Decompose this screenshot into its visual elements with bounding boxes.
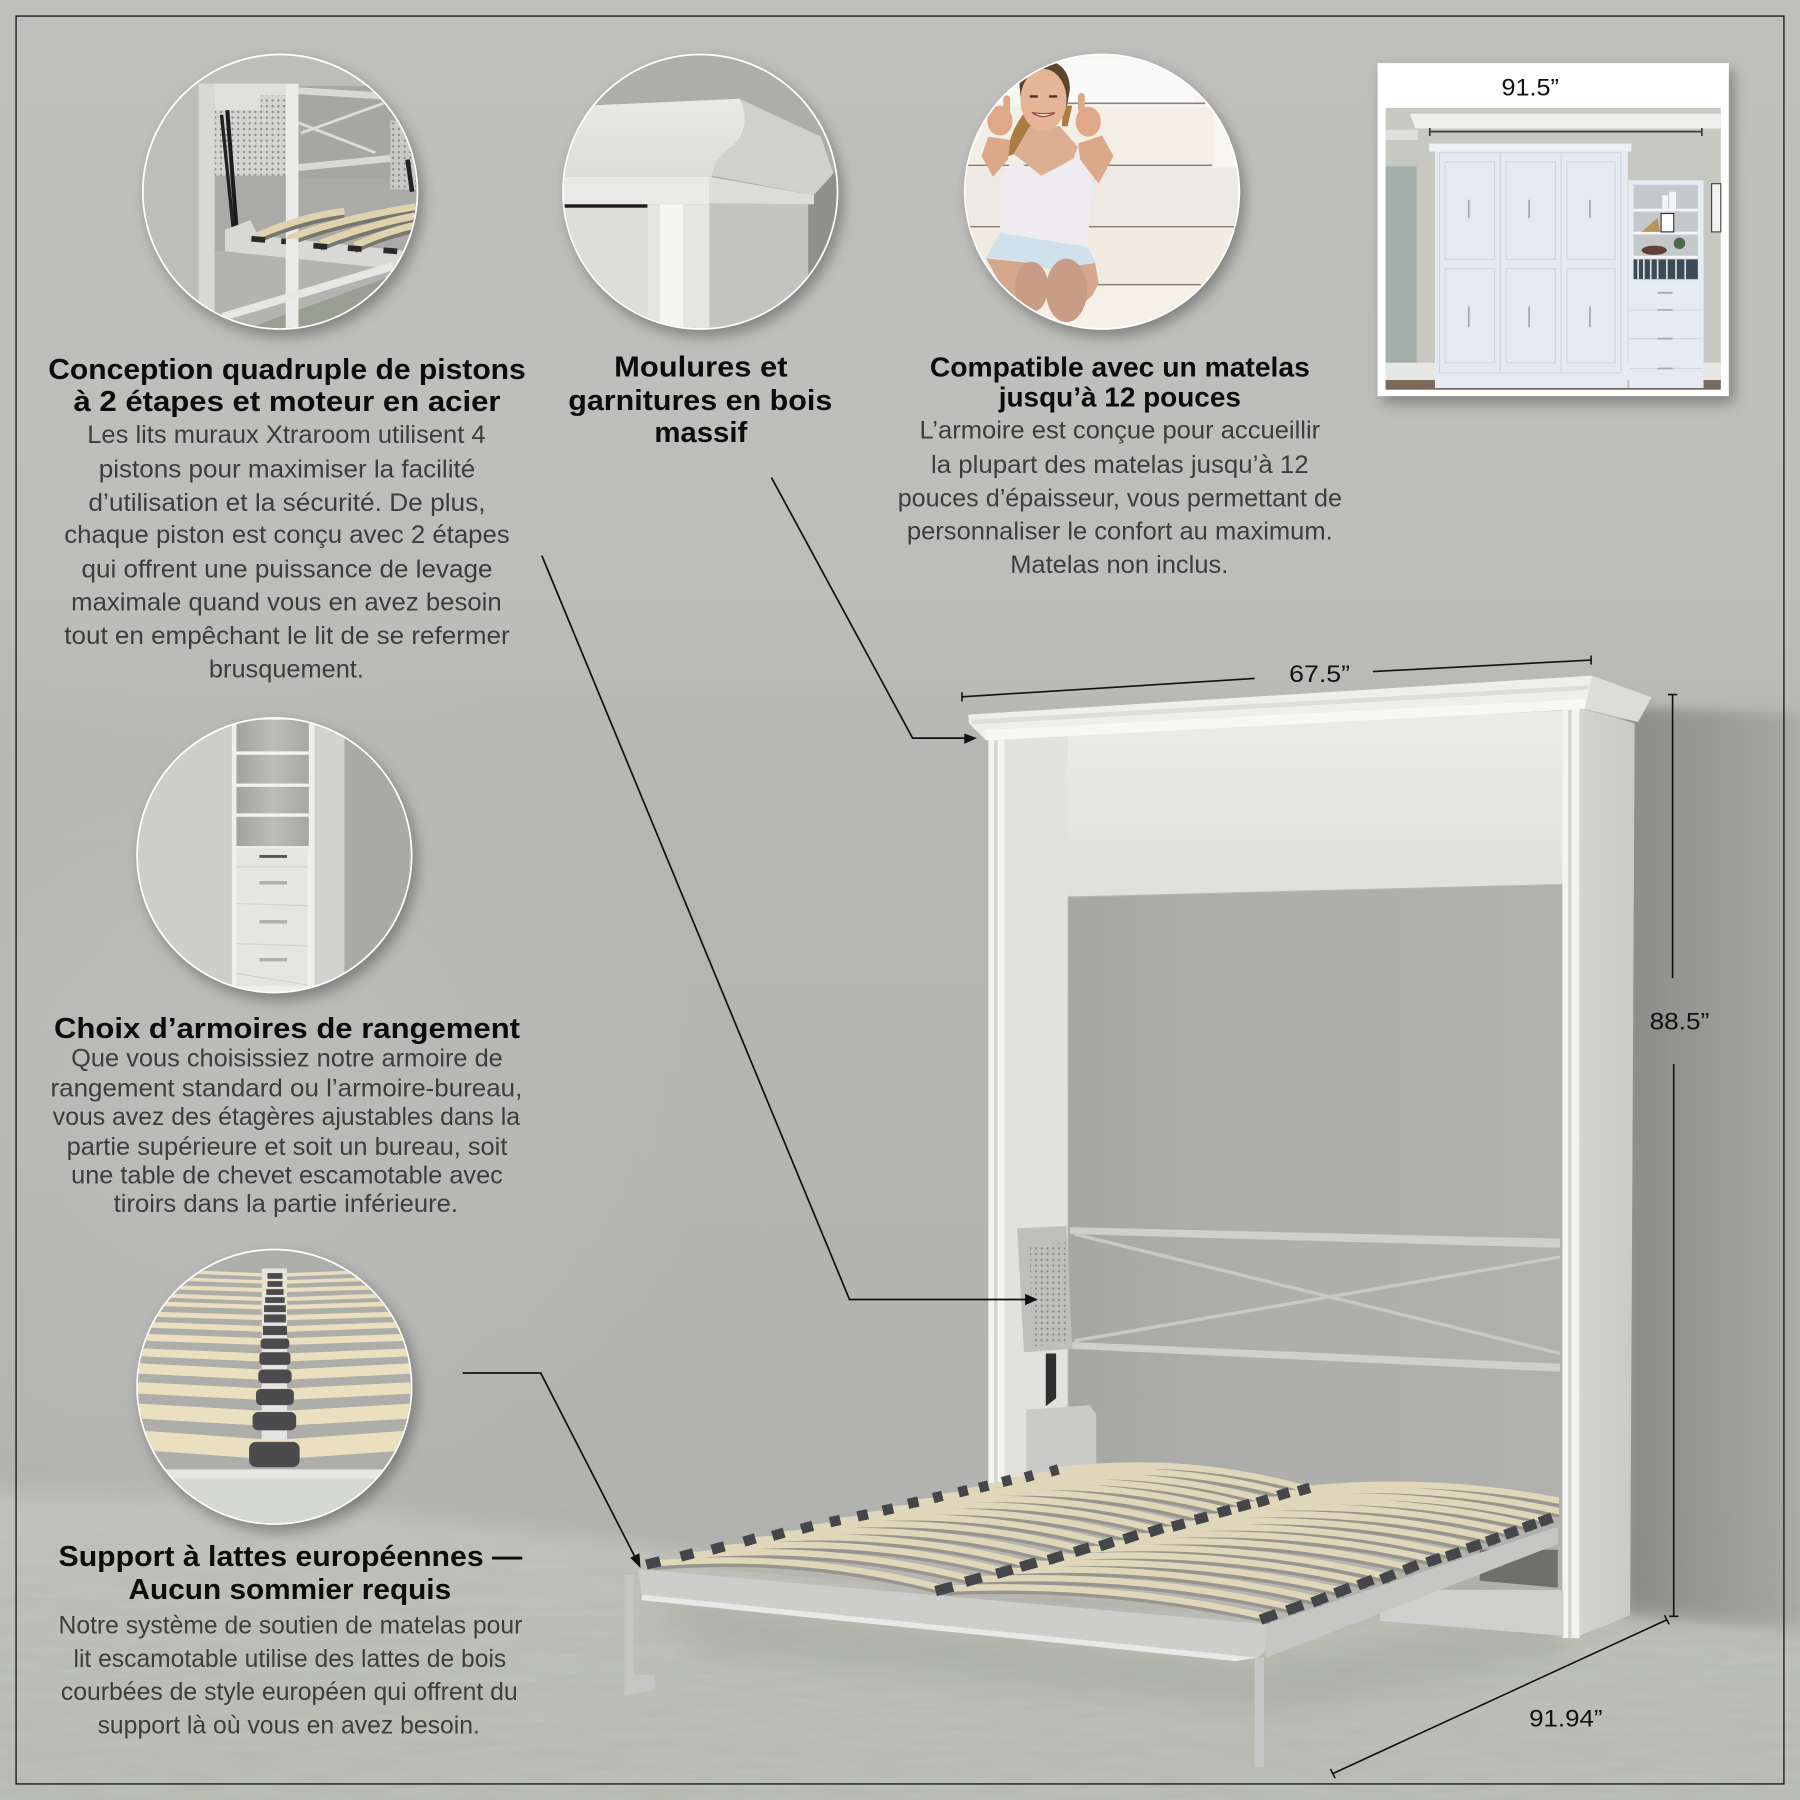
circle: piston detail: [138, 52, 425, 333]
shadow under bed: [643, 1598, 1564, 1710]
upper and lower cross bars: [1070, 1227, 1560, 1372]
text: storage body: Que vous choisissiez notre armoire de: [71, 1044, 503, 1072]
front rail: [638, 1569, 1266, 1658]
text: pistons body: d’utilisation et la sécurité. De plus,: [88, 489, 486, 517]
text: pistons body: qui offrent une puissance de levage: [82, 555, 492, 583]
heading: moldings: massif: [654, 417, 748, 449]
text: storage body: [51, 1044, 522, 1218]
circle: crown molding detail: [557, 52, 844, 334]
heading: pistons: à 2 étapes et moteur en acier: [73, 386, 501, 418]
cabinet cast shadow on wall: [1624, 707, 1800, 1635]
crown molding: [968, 676, 1651, 740]
text: mattress body: [898, 417, 1342, 579]
arrow: pistons to panel: [542, 556, 1038, 1305]
heading: slats: [59, 1541, 523, 1606]
inset bookcase unit: [1628, 180, 1704, 388]
heading: pistons: Conception quadruple de pistons: [48, 354, 526, 386]
heading: mattress: jusqu’à 12 pouces: [998, 381, 1241, 412]
text: pistons body: chaque piston est conçu avec 2 étapes: [64, 521, 510, 549]
text: mattress body: Matelas non inclus.: [1010, 551, 1228, 579]
cabinet header panel: [1066, 711, 1565, 897]
heading: slats: Aucun sommier requis: [129, 1574, 451, 1606]
heading: pistons: [48, 354, 526, 418]
wooden slats: [653, 1465, 1585, 1622]
rail and slats: [225, 220, 403, 268]
inset photo with dimension: [1378, 63, 1729, 396]
dimension: height 88.5: 88.5”: [1650, 1009, 1709, 1036]
front rail white trim: [642, 1595, 1258, 1661]
text: storage body: rangement standard ou l’armoire-bureau,: [51, 1074, 522, 1102]
text: pistons body: maximale quand vous en avez besoin: [71, 589, 502, 617]
heading: mattress: Compatible avec un matelas: [930, 352, 1310, 383]
bed frame mechanism: [1017, 1226, 1560, 1474]
text: pistons body: brusquement.: [209, 655, 364, 683]
right upright and side panel: [1380, 703, 1635, 1638]
feet: [1015, 262, 1048, 312]
text: slats body: courbées de style européen qui offrent du: [61, 1678, 518, 1706]
floor texture: [0, 1492, 1800, 1800]
right leg: [1255, 1658, 1264, 1767]
arms: [982, 137, 1010, 177]
wall behind frame: [138, 52, 425, 333]
mattress layers: [1068, 60, 1194, 102]
face: [1021, 69, 1066, 131]
inset room photo: [1386, 108, 1721, 390]
circle: european slats: [115, 1246, 436, 1533]
perforated side panel: [1017, 1226, 1072, 1352]
cabinet recess back wall: [1069, 885, 1564, 1527]
text: storage body: une table de chevet escamotable avec: [71, 1162, 503, 1190]
text: storage body: partie supérieure et soit un bureau, soit: [67, 1133, 507, 1161]
text: mattress body: la plupart des matelas jusqu’à 12: [931, 451, 1309, 479]
dimension: depth 91.94: 91.94”: [1529, 1706, 1603, 1733]
heading: moldings: [568, 352, 832, 449]
thighs: [986, 258, 1028, 300]
wall bed cabinet: [968, 676, 1651, 1638]
central strap: [262, 1268, 287, 1440]
text: slats body: support là où vous en avez besoin.: [98, 1711, 480, 1739]
circle: storage cabinet: [132, 714, 419, 995]
heading: moldings: garnitures en bois: [568, 385, 832, 417]
gas piston: [1046, 1353, 1056, 1406]
text: pistons body: [64, 421, 510, 683]
text: pistons body: tout en empêchant le lit de se refermer: [64, 622, 510, 650]
hands: [987, 106, 1012, 135]
heading: moldings: Moulures et: [614, 352, 788, 384]
dimension: width 67.5: [962, 655, 1591, 701]
hair: [1019, 62, 1070, 115]
text: mattress body: L’armoire est conçue pour accueillir: [920, 417, 1320, 445]
text: mattress body: personnaliser le confort au maximum.: [907, 518, 1333, 546]
heading: slats: Support à lattes européennes —: [59, 1541, 523, 1573]
frame posts and header: [199, 84, 298, 110]
floor: [0, 1492, 1800, 1800]
text: pistons body: pistons pour maximiser la facilité: [99, 456, 475, 484]
heading: storage: Choix d’armoires de rangement: [54, 1013, 520, 1045]
text: slats body: lit escamotable utilise des lattes de bois: [73, 1645, 506, 1673]
left upright: [988, 735, 1068, 1483]
slat holder blocks: [646, 1469, 1552, 1620]
text: slats body: Notre système de soutien de matelas pour: [59, 1612, 522, 1640]
inset dimension line: [1430, 128, 1702, 136]
dimension: width 67.5: 67.5”: [1289, 661, 1350, 688]
arrow: moldings to crown: [771, 478, 977, 744]
shorts: [986, 233, 1096, 270]
text: storage body: vous avez des étagères ajustables dans la: [53, 1103, 521, 1131]
arrow: slats to bed: [463, 1373, 641, 1568]
wall light patch: [0, 574, 987, 1527]
text: slats body: [59, 1612, 522, 1739]
heading: mattress: [930, 352, 1310, 412]
panel: [215, 95, 286, 176]
chest: [1014, 126, 1078, 176]
inset wardrobe doors: [1429, 143, 1631, 388]
dimension: depth 91.94: [1330, 1615, 1669, 1778]
tank top: [1000, 147, 1093, 247]
bars: [298, 87, 380, 100]
bed platform: [624, 1465, 1585, 1767]
left leg: [624, 1575, 654, 1696]
slat bed base: [653, 1471, 1559, 1617]
side rail: [1266, 1527, 1558, 1658]
text: mattress body: pouces d’épaisseur, vous permettant de: [898, 484, 1342, 512]
text: storage body: tiroirs dans la partie inférieure.: [114, 1190, 458, 1218]
lower side plate: [1026, 1405, 1096, 1474]
circle: woman on mattresses: [962, 52, 1243, 333]
inset dimension label: 91.5”: [1502, 74, 1559, 101]
inset white card: [1378, 63, 1729, 396]
text: pistons body: Les lits muraux Xtraroom utilisent 4: [87, 421, 486, 449]
pistons: [222, 115, 234, 238]
dimension: height 88.5: [1650, 695, 1709, 1616]
